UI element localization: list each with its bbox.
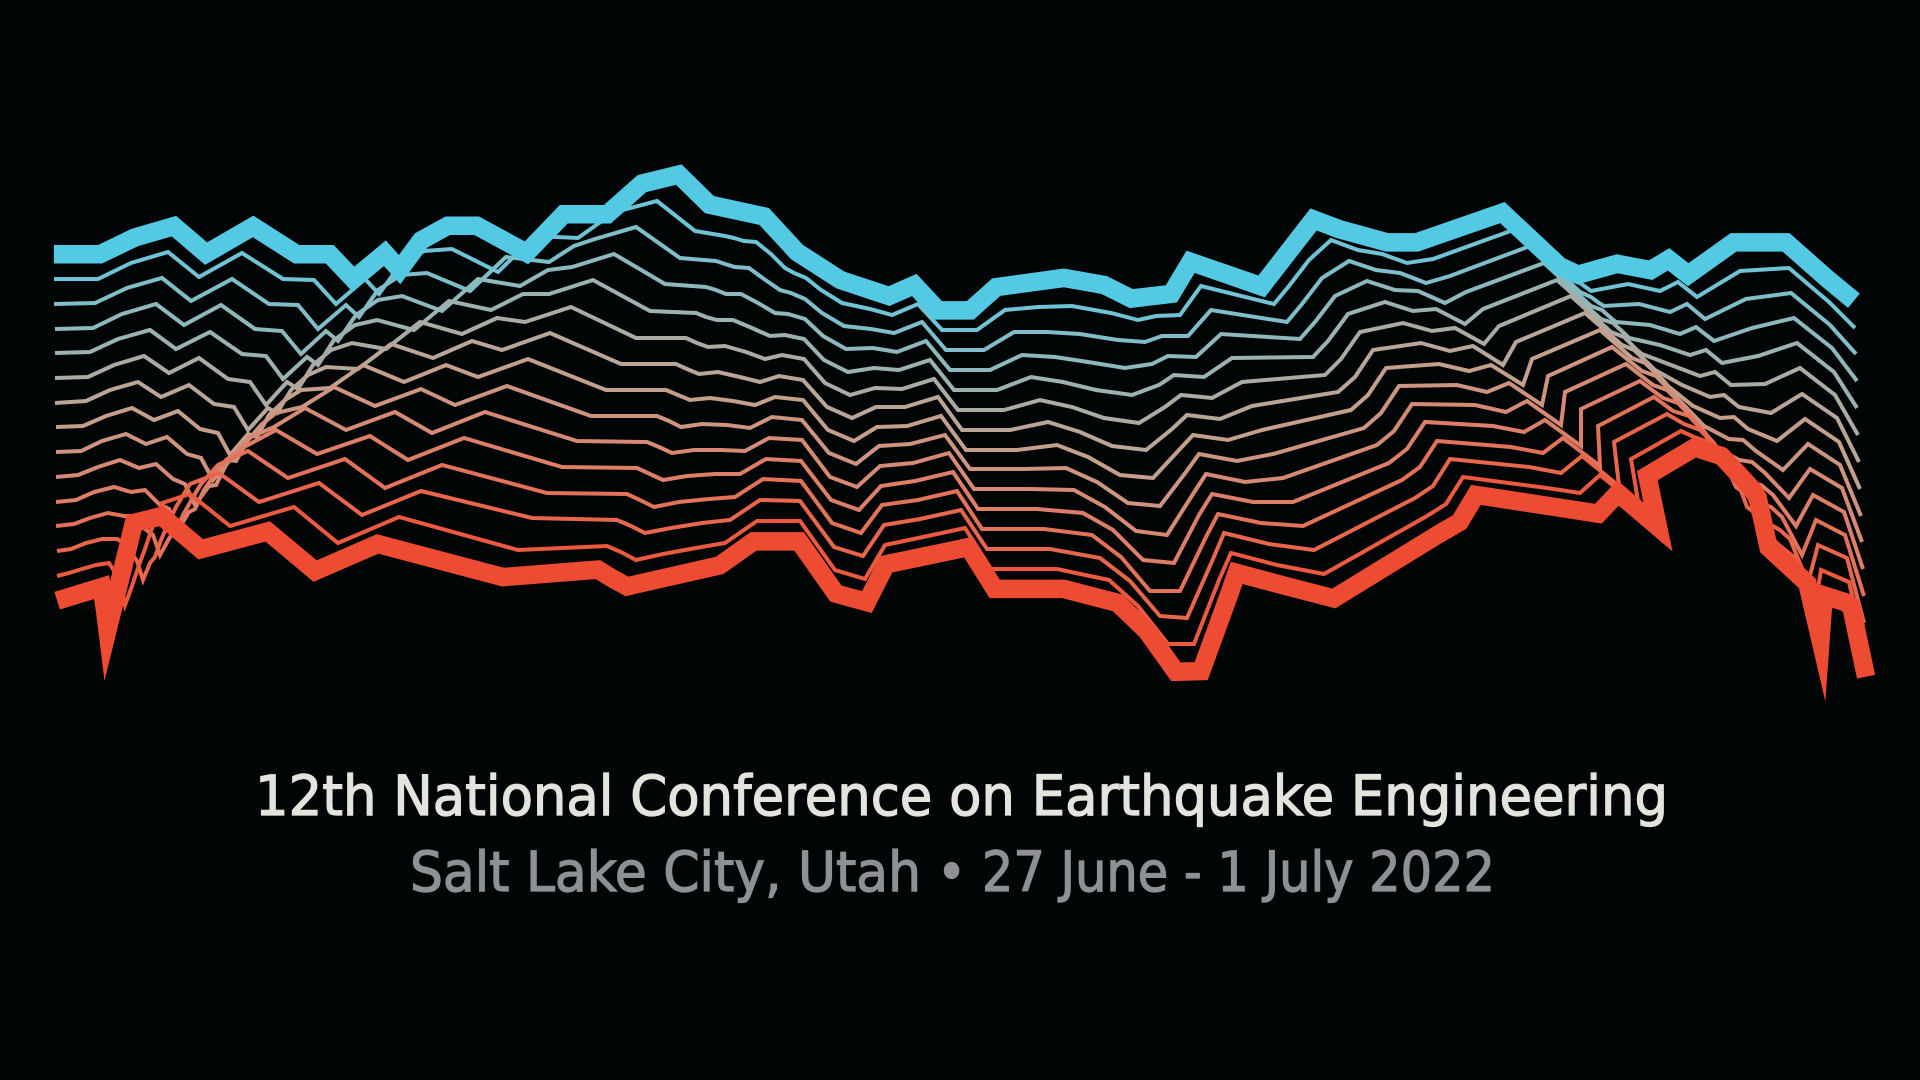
subtitle: location and dates: Salt Lake City, Utah bbox=[410, 840, 921, 904]
thick blue line bbox=[54, 175, 1854, 310]
seismic line blend chart bbox=[54, 175, 1866, 677]
subtitle: location and dates: • 27 June - 1 July 2022 bbox=[937, 840, 1495, 904]
subtitle: location and dates bbox=[410, 840, 1495, 904]
title: 12th National Conference on Earthquake Engineering bbox=[255, 764, 1668, 828]
thick red line bbox=[57, 448, 1866, 677]
